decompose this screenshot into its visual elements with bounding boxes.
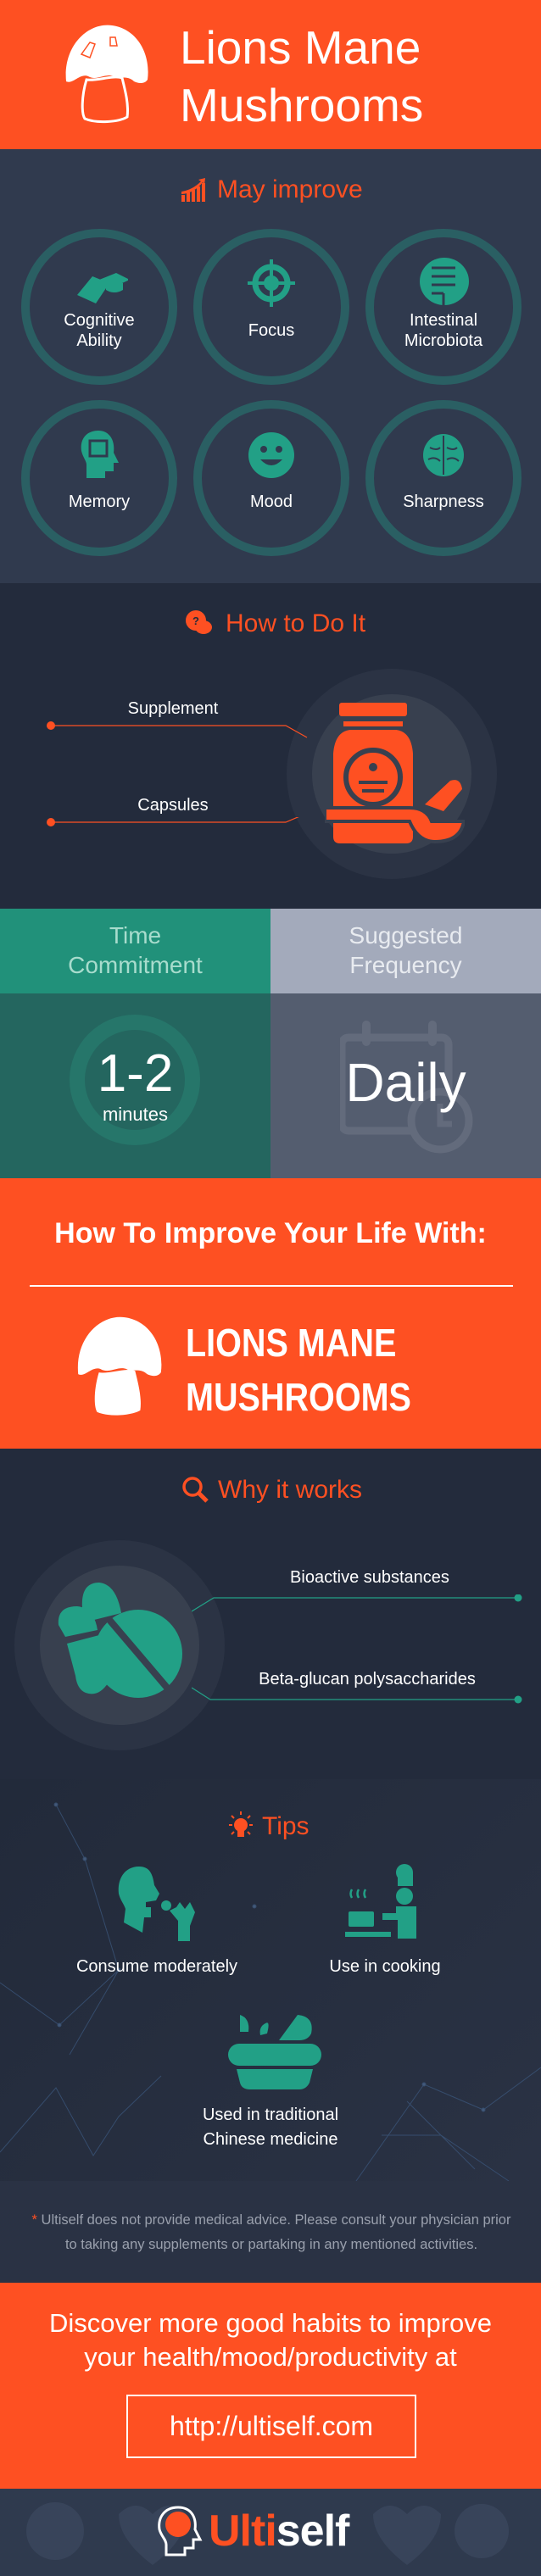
clock value: minutes xyxy=(103,1104,168,1125)
item: cognitive ability xyxy=(21,229,177,385)
item: intestinal microbiota xyxy=(365,229,521,385)
calendar value xyxy=(270,993,541,1178)
clock value xyxy=(0,993,270,1178)
item: sharpness: Sharpness xyxy=(403,492,484,511)
title: lions mane mushrooms xyxy=(186,1321,411,1419)
panel: suggested frequency xyxy=(270,909,541,1178)
disclaimer xyxy=(0,2181,541,2283)
item: mood: Mood xyxy=(250,492,293,511)
cta text: Discover more good habits to improve xyxy=(49,2308,492,2338)
url button xyxy=(126,2395,416,2458)
heading: why it works: Why it works xyxy=(218,1476,362,1504)
item: memory: Memory xyxy=(69,492,130,511)
tip: consume moderately xyxy=(76,1867,237,1976)
url button: http://ultiself.com xyxy=(170,2411,373,2441)
title: lions mane mushrooms: LIONS MANE xyxy=(186,1321,396,1365)
logo: Ultiself xyxy=(209,2506,349,2556)
heading: tips: Tips xyxy=(262,1812,310,1840)
disclaimer: * Ultiself does not provide medical advice. Please consult your physician prior to taking any supplements or partaking in any mentioned activities. xyxy=(32,2212,510,2252)
heading: how to improve: How To Improve Your Life With: xyxy=(54,1217,487,1249)
panel: call to action xyxy=(0,2283,541,2489)
cta text xyxy=(49,2308,492,2372)
panel: tips xyxy=(0,1779,541,2181)
cta text: your health/mood/productivity at xyxy=(84,2342,457,2372)
heading: time commitment: Commitment xyxy=(68,952,203,978)
icon: supplement jar in circle xyxy=(287,669,497,879)
icon: mushroom xyxy=(66,25,148,124)
item: memory xyxy=(21,400,177,556)
item: intestinal microbiota: Intestinal xyxy=(410,311,477,330)
tip: traditional chinese medicine xyxy=(203,2015,338,2149)
panel: why it works xyxy=(0,1449,541,1779)
item: focus: Focus xyxy=(248,321,294,340)
callout: bioactive substances xyxy=(192,1568,522,1612)
heading: time commitment: Time xyxy=(109,922,161,949)
panel: time commitment xyxy=(0,909,270,1178)
clock value: 1-2 xyxy=(98,1044,173,1103)
icon: mushroom xyxy=(78,1317,161,1416)
panel: may improve xyxy=(0,149,541,583)
tip: use in cooking: Use in cooking xyxy=(329,1957,441,1976)
footer: logo xyxy=(0,2489,541,2576)
title xyxy=(180,21,423,131)
tip: traditional chinese medicine: Chinese medicine xyxy=(204,2130,337,2149)
item: mood xyxy=(193,400,349,556)
panel: how to do it xyxy=(0,583,541,909)
callout: capsules xyxy=(47,796,298,826)
heading: time commitment xyxy=(0,909,270,993)
callout: beta-glucan: Beta-glucan polysaccharides xyxy=(259,1670,476,1689)
heading: suggested frequency: Frequency xyxy=(349,952,462,978)
calendar value: Daily xyxy=(345,1052,466,1113)
item: focus xyxy=(193,229,349,385)
callout: supplement xyxy=(47,699,307,737)
heading: may improve: May improve xyxy=(217,175,363,203)
callout: capsules: Capsules xyxy=(137,796,209,815)
panel: how to improve banner xyxy=(0,1178,541,1449)
tip: traditional chinese medicine: Used in traditional xyxy=(203,2106,338,2124)
title: lions mane mushrooms: MUSHROOMS xyxy=(186,1375,411,1419)
tip: consume moderately: Consume moderately xyxy=(76,1957,237,1976)
tip: use in cooking xyxy=(329,1864,441,1976)
heading: how to do it: ? xyxy=(192,615,199,627)
callout: supplement: Supplement xyxy=(128,699,218,718)
icon: pills in circle xyxy=(14,1540,225,1750)
callout: beta-glucan xyxy=(192,1670,522,1704)
title: Mushrooms xyxy=(180,79,423,131)
item: intestinal microbiota: Microbiota xyxy=(404,331,482,350)
heading: suggested frequency xyxy=(270,909,541,993)
title: Lions Mane xyxy=(180,21,421,74)
header banner xyxy=(0,0,541,149)
heading: tips xyxy=(229,1811,310,1840)
item: sharpness xyxy=(365,400,521,556)
heading: how to do it: How to Do It xyxy=(226,609,365,637)
item: cognitive ability: Cognitive xyxy=(64,311,135,330)
heading: suggested frequency: Suggested xyxy=(349,922,462,949)
item: cognitive ability: Ability xyxy=(76,331,122,350)
callout: bioactive substances: Bioactive substances xyxy=(290,1568,449,1587)
